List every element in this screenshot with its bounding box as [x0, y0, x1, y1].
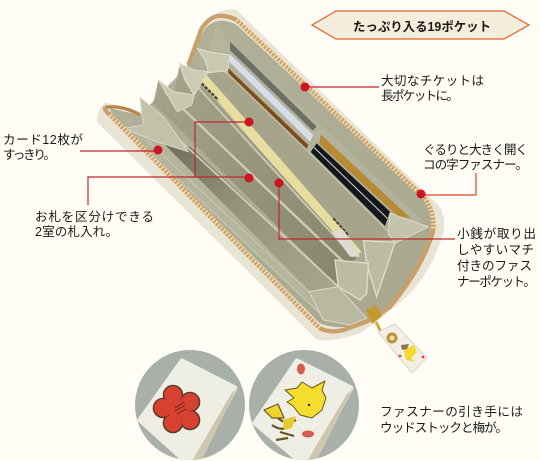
- petal bottom: [302, 430, 314, 438]
- mini woodstock: [404, 345, 417, 362]
- callout: coin pocket: しやすいマチ: [457, 243, 534, 257]
- callout: U-shaped zipper: ぐるりと大きく開く: [423, 143, 528, 157]
- detail circle: plum tab: [135, 350, 245, 461]
- yellow receipt strip: [196, 72, 362, 258]
- gussets lower right: [388, 213, 428, 243]
- petal top: [297, 364, 305, 374]
- ticket: black: [311, 143, 390, 226]
- wing: [264, 404, 284, 418]
- ticket: white and blue: [228, 54, 313, 142]
- wallet outer shell: [97, 9, 444, 340]
- callout: card slots: すっきり。: [3, 148, 56, 162]
- callout: long pocket: 長ポケットに。: [381, 89, 459, 103]
- callout: coin pocket: 小銭が取り出: [457, 227, 536, 241]
- lower flap card slots: [123, 128, 343, 318]
- pocket panel 3: [153, 80, 343, 287]
- callout: coin pocket: [274, 178, 536, 289]
- zipper tape: [105, 16, 434, 331]
- pull tab body: [378, 324, 427, 373]
- callout: two-compartment bill section: [35, 118, 254, 239]
- callout: U-shaped zipper: [416, 143, 528, 198]
- chain ring: [376, 322, 381, 332]
- long pocket slot: [227, 37, 423, 230]
- legs: [272, 418, 296, 440]
- pocket panel 4 edge: [143, 107, 338, 287]
- wallet photo: [97, 9, 444, 340]
- callout: coin pocket: 付きのファス: [457, 259, 532, 273]
- caption: zipper pull: [380, 405, 523, 435]
- banner: 19 pockets: たっぷり入る19ポケット: [353, 20, 491, 34]
- leather tab: [140, 361, 235, 461]
- zipper lower flap top: [105, 107, 140, 115]
- callout: long pocket: [300, 74, 484, 103]
- woodstock figure: [264, 364, 326, 440]
- ticket: grey: [230, 42, 317, 131]
- banner: 19 pockets: [312, 11, 529, 39]
- callout: card slots: [3, 133, 162, 162]
- callout: U-shaped zipper: コの字ファスナー。: [423, 158, 528, 172]
- callout: coin pocket: ナーポケット。: [457, 275, 536, 289]
- ticket: gold: [319, 134, 411, 218]
- zipper teeth: [110, 20, 434, 328]
- zipper pull slider interior: [332, 230, 360, 257]
- callout: card slots: カード12枚が: [3, 133, 83, 147]
- crest and head: [285, 381, 326, 418]
- detail circle: Woodstock tab: [249, 350, 359, 461]
- lower flap shadow: [162, 142, 338, 292]
- callout: two-compartment bill section: 2室の札入れ。: [35, 225, 118, 239]
- zipper slider and pull tab: [366, 305, 427, 373]
- wallet lining: [110, 21, 432, 327]
- eyelet: [386, 332, 398, 344]
- pocket panel 1: [205, 59, 388, 253]
- callout: long pocket: 大切なチケットは: [381, 74, 484, 88]
- caption: zipper pull: ファスナーの引き手には: [380, 405, 523, 419]
- caption: zipper pull: ウッドストックと梅が。: [380, 421, 508, 435]
- plum flower: [154, 386, 200, 432]
- ticket: brown: [228, 68, 308, 150]
- leather tab: [255, 361, 351, 461]
- pocket panel 2: [173, 63, 357, 267]
- callout: two-compartment bill section: お札を区分けできる: [35, 210, 154, 224]
- slider: [366, 305, 382, 324]
- gussets upper left: [197, 48, 230, 73]
